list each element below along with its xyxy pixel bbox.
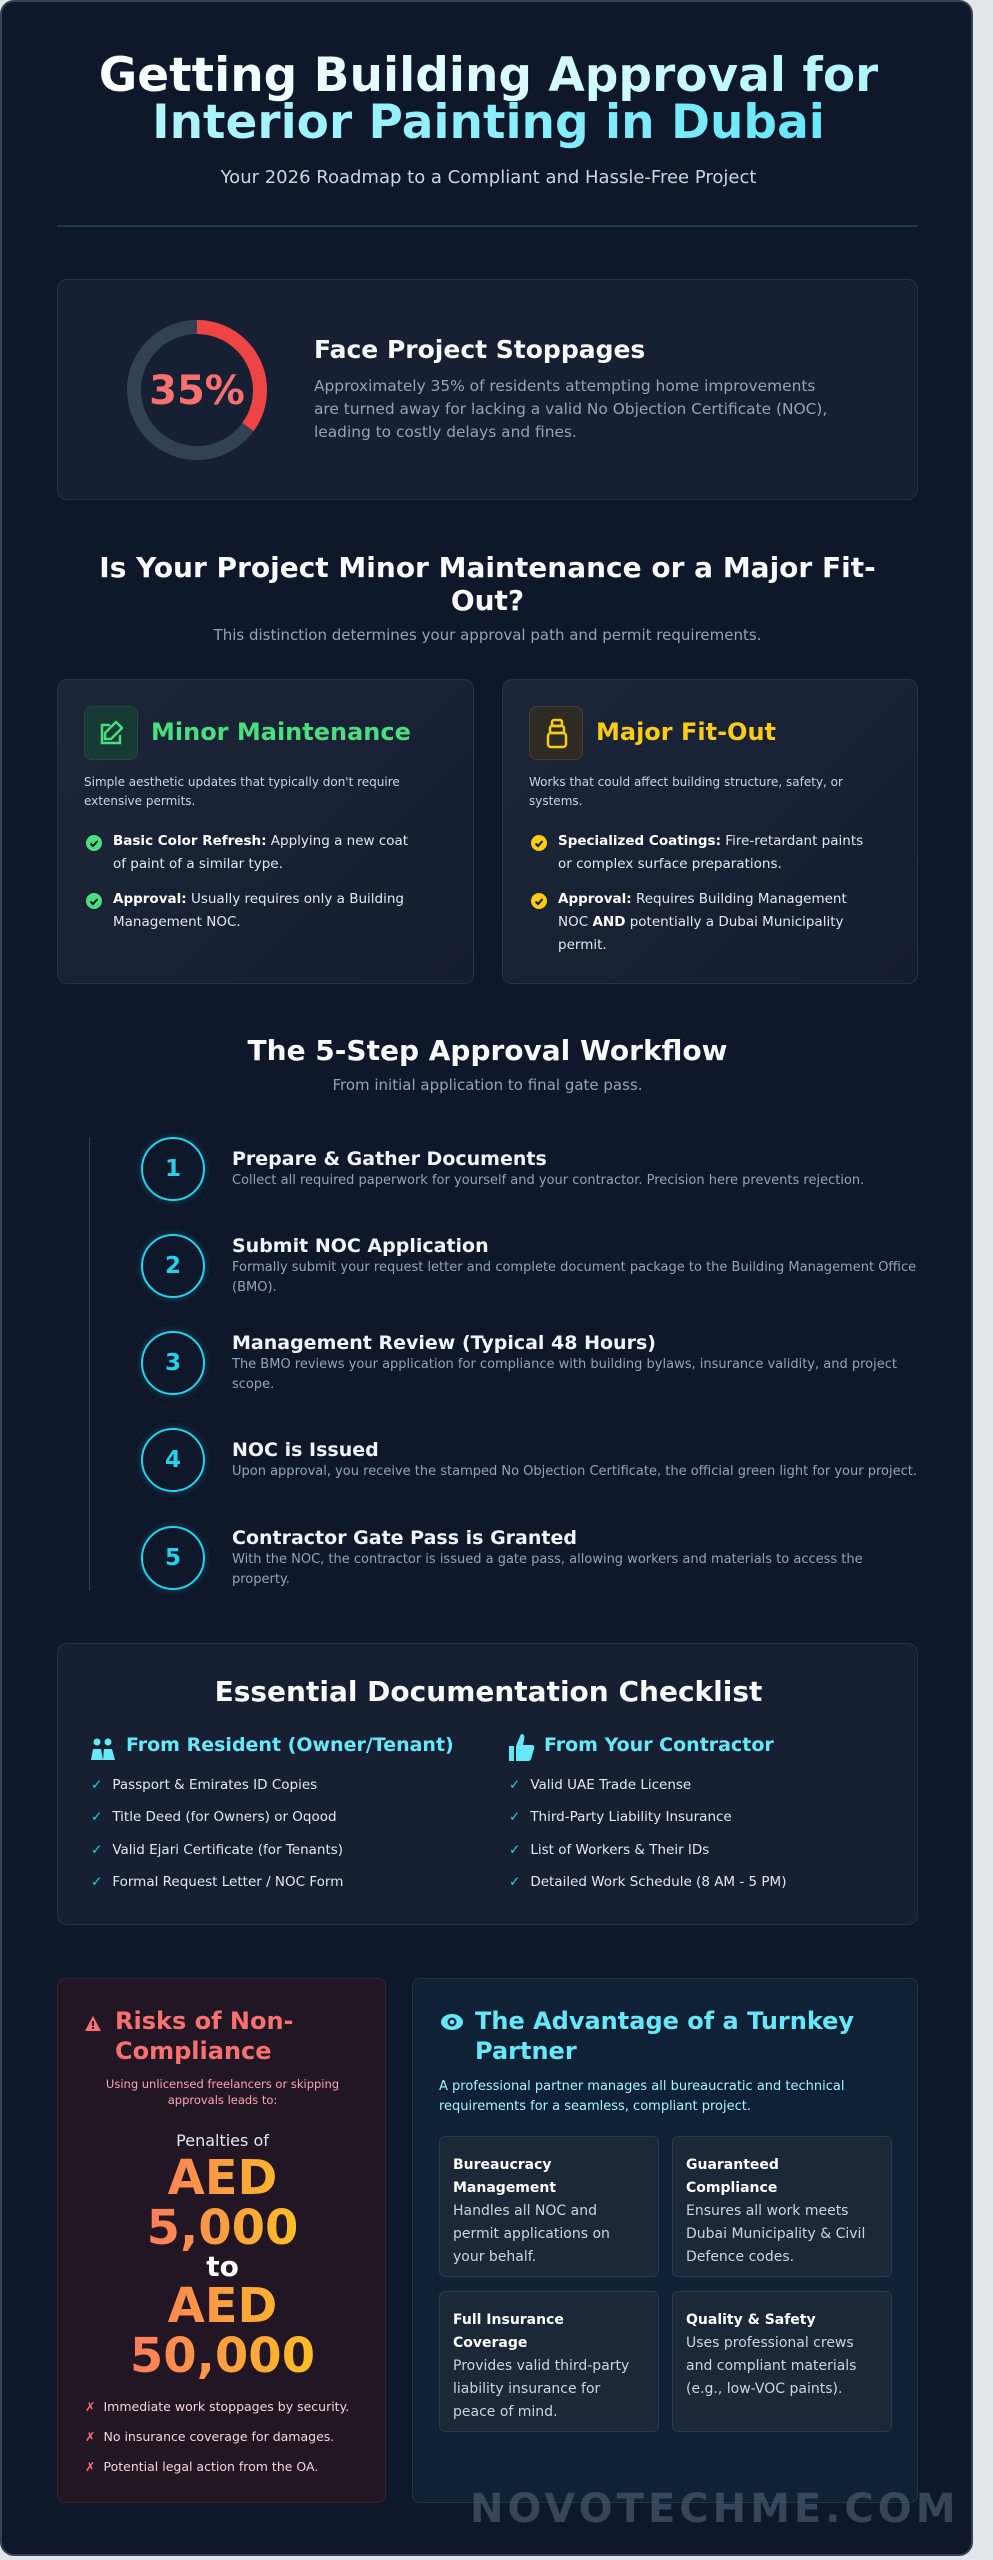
column: contractor: ✓ Detailed Work Schedule (8 AM - 5 PM) — [509, 1874, 786, 1890]
panel: turnkey partner — [412, 1978, 918, 2503]
heading: minor vs major — [99, 551, 876, 617]
benefit: compliance — [672, 2136, 892, 2277]
step 5: Contractor Gate Pass is Granted — [232, 1527, 577, 1549]
heading: Minor Maintenance — [151, 718, 411, 746]
column: resident: ✓ Passport & Emirates ID Copies — [91, 1777, 317, 1793]
step 5: With the NOC, the contractor is issued a gate pass, allowing workers and materials to access the property. — [232, 1552, 863, 1587]
penalty figure: 50,000 — [130, 2328, 315, 2384]
step 1 — [138, 1134, 864, 1204]
benefit: bureaucracy: Handles all NOC and permit applications on your behalf. — [453, 2203, 610, 2265]
column: contractor: From Your Contractor — [544, 1734, 774, 1756]
panel: major fit-out: Approval: Requires Building Management NOC AND potentially a Dubai Municipality permit. — [558, 891, 847, 953]
benefit: bureaucracy — [439, 2136, 659, 2277]
text block: Approximately 35% of residents attempting home improvements — [314, 377, 815, 395]
step 2: 2 — [165, 1253, 181, 1279]
icon: paint bucket — [529, 706, 583, 760]
benefit: quality: Quality & Safety — [686, 2312, 816, 2328]
step 3 — [138, 1328, 897, 1398]
step 3: Management Review (Typical 48 Hours) — [232, 1332, 656, 1354]
panel: minor maintenance: of paint of a similar type. — [113, 856, 283, 872]
panel: minor maintenance: Basic Color Refresh: Applying a new coat — [113, 833, 408, 849]
column: resident: ✓ Valid Ejari Certificate (for Tenants) — [91, 1842, 343, 1858]
column: resident: ✓ Formal Request Letter / NOC Form — [91, 1874, 343, 1890]
title: Interior Painting in Dubai — [152, 95, 825, 150]
panel: minor maintenance: Approval: Usually requires only a Building Management NOC. — [113, 891, 404, 930]
step 5: 5 — [165, 1545, 181, 1571]
panel: minor maintenance — [57, 679, 474, 984]
column: contractor: ✓ List of Workers & Their IDs — [509, 1842, 709, 1858]
penalty figure: AED — [168, 2150, 277, 2206]
column: contractor — [509, 1734, 786, 1890]
benefit: compliance: Ensures all work meets Dubai Municipality & Civil Defence codes. — [686, 2203, 865, 2265]
text block: A professional partner manages all bureaucratic and technical requirements for a seamless, compliant project. — [439, 2079, 844, 2114]
step 1: Collect all required paperwork for yourself and your contractor. Precision here prevents rejection. — [232, 1173, 864, 1188]
heading: workflow: The 5-Step Approval Workflow — [248, 1034, 727, 1067]
heading: minor vs major: Out? — [451, 584, 524, 617]
panel: major fit-out: or complex surface preparations. — [558, 856, 782, 872]
panel: stat stoppages — [57, 279, 918, 500]
bullet list: ✗ Potential legal action from the OA. — [85, 2459, 318, 2474]
penalty figure: AED — [168, 2278, 277, 2334]
heading: Essential Documentation Checklist — [215, 1675, 762, 1708]
benefit: compliance: Guaranteed Compliance — [686, 2157, 779, 2196]
step 4: 4 — [165, 1447, 181, 1473]
step 2: Submit NOC Application — [232, 1235, 489, 1257]
bullet list — [531, 833, 863, 953]
text block: leading to costly delays and fines. — [314, 423, 577, 441]
panel: major fit-out: Specialized Coatings: Fire-retardant paints — [558, 833, 863, 849]
title: Getting Building Approval for — [99, 48, 878, 103]
heading: Major Fit-Out — [596, 718, 776, 746]
subtitle: Your 2026 Roadmap to a Compliant and Hassle-Free Project — [221, 167, 756, 188]
bullet list: ✗ Immediate work stoppages by security. — [85, 2399, 349, 2414]
chart: donut 35% — [127, 320, 267, 460]
subheading: This distinction determines your approval path and permit requirements. — [214, 626, 761, 644]
icon: thumbs up — [509, 1734, 534, 1761]
step 4: Upon approval, you receive the stamped No Objection Certificate, the official green light for your project. — [232, 1464, 917, 1479]
text block: Using unlicensed freelancers or skipping approvals leads to: — [106, 2077, 339, 2107]
benefit: insurance: Provides valid third-party liability insurance for peace of mind. — [453, 2358, 629, 2420]
text block: Simple aesthetic updates that typically don't require extensive permits. — [84, 775, 400, 808]
column: contractor: ✓ Third-Party Liability Insurance — [509, 1809, 732, 1825]
benefit: quality — [672, 2291, 892, 2432]
heading: minor vs major: Is Your Project Minor Maintenance or a Major Fit- — [99, 551, 876, 584]
title — [99, 48, 878, 150]
benefit: bureaucracy: Bureaucracy Management — [453, 2157, 556, 2196]
column: resident: From Resident (Owner/Tenant) — [126, 1734, 454, 1756]
icon: pencil — [84, 706, 138, 760]
column: resident: ✓ Title Deed (for Owners) or Oqood — [91, 1809, 337, 1825]
subheading: From initial application to final gate pass. — [332, 1076, 643, 1094]
benefit: insurance: Full Insurance Coverage — [453, 2312, 564, 2351]
step 2: Formally submit your request letter and complete document package to the Building Management Office (BMO). — [232, 1260, 916, 1295]
panel: documentation checklist — [57, 1643, 918, 1925]
benefit: insurance — [439, 2291, 659, 2432]
icon: eye — [441, 2014, 463, 2030]
heading: Face Project Stoppages — [314, 335, 645, 364]
watermark: NOVOTECHME.COM — [470, 2486, 960, 2532]
bullet list — [85, 2399, 349, 2474]
heading: The Advantage of a Turnkey Partner — [475, 2007, 854, 2065]
column: contractor: ✓ Valid UAE Trade License — [509, 1777, 691, 1793]
icon: warning — [85, 2016, 101, 2031]
column: resident — [91, 1734, 454, 1890]
step 5 — [138, 1522, 863, 1594]
penalty figure: 5,000 — [147, 2200, 298, 2256]
penalty figure: Penalties of — [176, 2131, 269, 2150]
penalty figure — [130, 2131, 315, 2384]
text block — [314, 377, 827, 441]
step 4: NOC is Issued — [232, 1439, 379, 1461]
text block: Works that could affect building structure, safety, or systems. — [529, 775, 843, 808]
step 4 — [138, 1424, 917, 1496]
step 3: The BMO reviews your application for compliance with building bylaws, insurance validity, and project scope. — [232, 1357, 897, 1392]
panel: major fit-out — [502, 679, 918, 984]
text block: are turned away for lacking a valid No Objection Certificate (NOC), — [314, 400, 827, 418]
chart: donut 35%: 35% — [149, 368, 245, 414]
panel: risks of non-compliance — [57, 1978, 386, 2503]
icon: people — [91, 1738, 115, 1760]
bullet list: ✗ No insurance coverage for damages. — [85, 2429, 334, 2444]
step 3: 3 — [165, 1350, 181, 1376]
step 1: Prepare & Gather Documents — [232, 1148, 547, 1170]
step 1: 1 — [165, 1156, 181, 1182]
penalty figure: to — [206, 2250, 239, 2283]
heading: Risks of Non-Compliance — [115, 2007, 294, 2065]
step 2 — [138, 1230, 916, 1302]
bullet list — [86, 833, 408, 930]
benefit: quality: Uses professional crews and compliant materials (e.g., low-VOC paints). — [686, 2335, 856, 2397]
